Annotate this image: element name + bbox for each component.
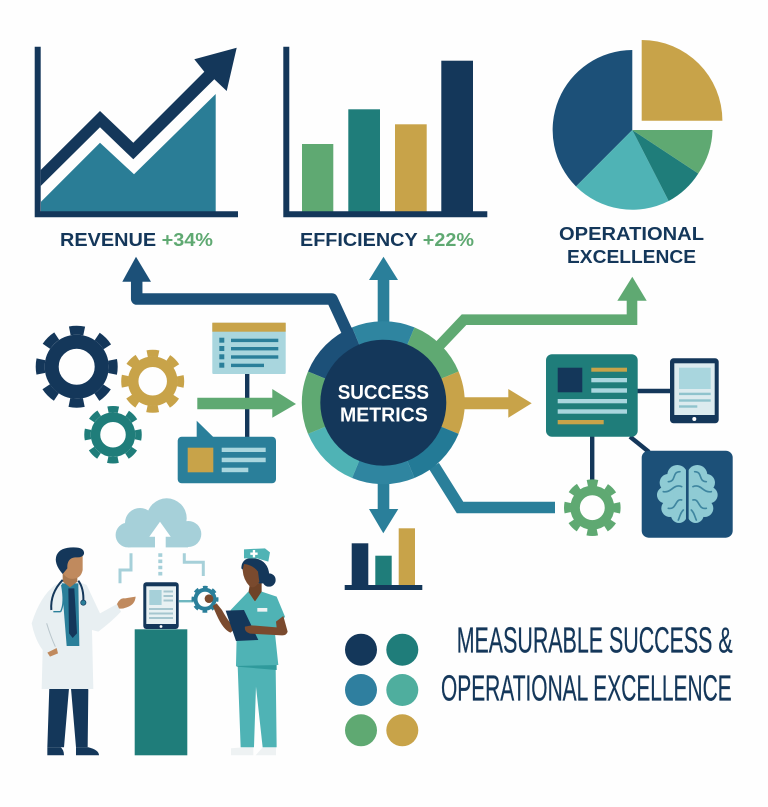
- icon: pedestal tablet: [143, 582, 179, 629]
- arrow: to operational excellence: [440, 277, 647, 345]
- chart: small bar chart: [345, 528, 422, 590]
- panel: pedestal: [135, 629, 187, 755]
- title: measurable success and operational excellence: [441, 620, 733, 709]
- icon: teal gear: [88, 409, 138, 460]
- icon: success metrics hub: [289, 309, 477, 497]
- icon: small gear with link: [179, 587, 217, 611]
- connector: vertical line between cards: [245, 374, 249, 437]
- heading: success metrics: METRICS: [340, 405, 428, 427]
- chart: revenue area chart: [38, 47, 238, 214]
- heading: revenue metric: REVENUE +34%: [60, 229, 213, 250]
- panel: brain card: [642, 451, 733, 538]
- panel: speech bubble card: [178, 421, 276, 483]
- chart: operational excellence pie chart: [553, 40, 722, 210]
- heading: efficiency metric: EFFICIENCY +22%: [300, 229, 474, 250]
- icon: gold gear: [125, 353, 181, 409]
- icon: cloud upload: [116, 498, 203, 583]
- arrow: to revenue: [122, 257, 350, 338]
- icon: tablet: [670, 358, 719, 423]
- legend: colour palette dots: [345, 634, 418, 746]
- icon: brain: [657, 463, 718, 525]
- heading: operational excellence: [559, 223, 704, 267]
- icon: rising trend arrow: [41, 48, 237, 186]
- figure: doctor: [32, 547, 136, 755]
- connector: report card links: [592, 391, 672, 482]
- heading: success metrics: [338, 382, 429, 427]
- arrow: connector to green gear: [434, 466, 555, 508]
- arrow: to efficiency: [369, 257, 398, 326]
- icon: navy gear: [40, 330, 113, 403]
- heading: operational excellence: EXCELLENCE: [567, 246, 696, 267]
- arrow: gold to report card: [460, 389, 532, 418]
- figure: nurse: [205, 548, 288, 755]
- heading: success metrics: SUCCESS: [338, 382, 429, 404]
- panel: list card: [212, 323, 286, 374]
- heading: operational excellence: OPERATIONAL: [559, 223, 704, 244]
- arrow: to small bar chart: [369, 480, 398, 533]
- arrow: green into hub: [197, 389, 296, 418]
- panel: report card: [546, 354, 638, 437]
- chart: efficiency bar chart: [286, 47, 487, 214]
- icon: green gear: [567, 483, 617, 533]
